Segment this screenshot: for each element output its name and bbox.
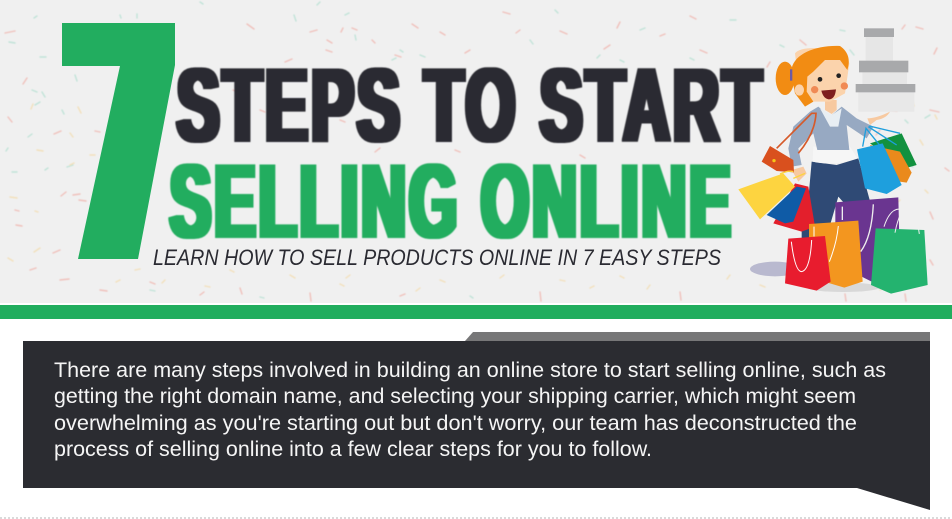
subtitle: LEARN HOW TO SELL PRODUCTS ONLINE IN 7 EASY STEPS (153, 245, 721, 270)
icon: hand-held bags left (738, 171, 815, 232)
illustration: shopper with bags (738, 28, 928, 294)
icon: woman (776, 46, 890, 240)
panel text: process of selling online into a few clear steps for you to follow. (54, 438, 652, 461)
icon: red bag (785, 236, 831, 291)
icon: orange bag (809, 221, 863, 288)
header background (0, 0, 952, 303)
floor shadow (750, 262, 800, 276)
panel text: There are many steps involved in building an online store to start selling online, such as (54, 359, 886, 382)
panel body (23, 341, 930, 510)
icon: shoulder purse (762, 113, 816, 172)
icon: hand-held bags right (857, 126, 917, 194)
panel text (54, 359, 886, 461)
icon: green bag (871, 209, 928, 294)
big number 7 (62, 23, 175, 259)
intro panel (23, 332, 930, 510)
icon: purple bag (835, 197, 900, 282)
green divider band (0, 305, 952, 319)
panel text: overwhelming as you're starting out but don't worry, our team has deconstructed the (54, 412, 857, 435)
panel text: getting the right domain name, and selecting your shipping carrier, which might seem (54, 385, 856, 408)
icon: stacked gift boxes (856, 28, 915, 112)
panel tab (465, 332, 930, 341)
